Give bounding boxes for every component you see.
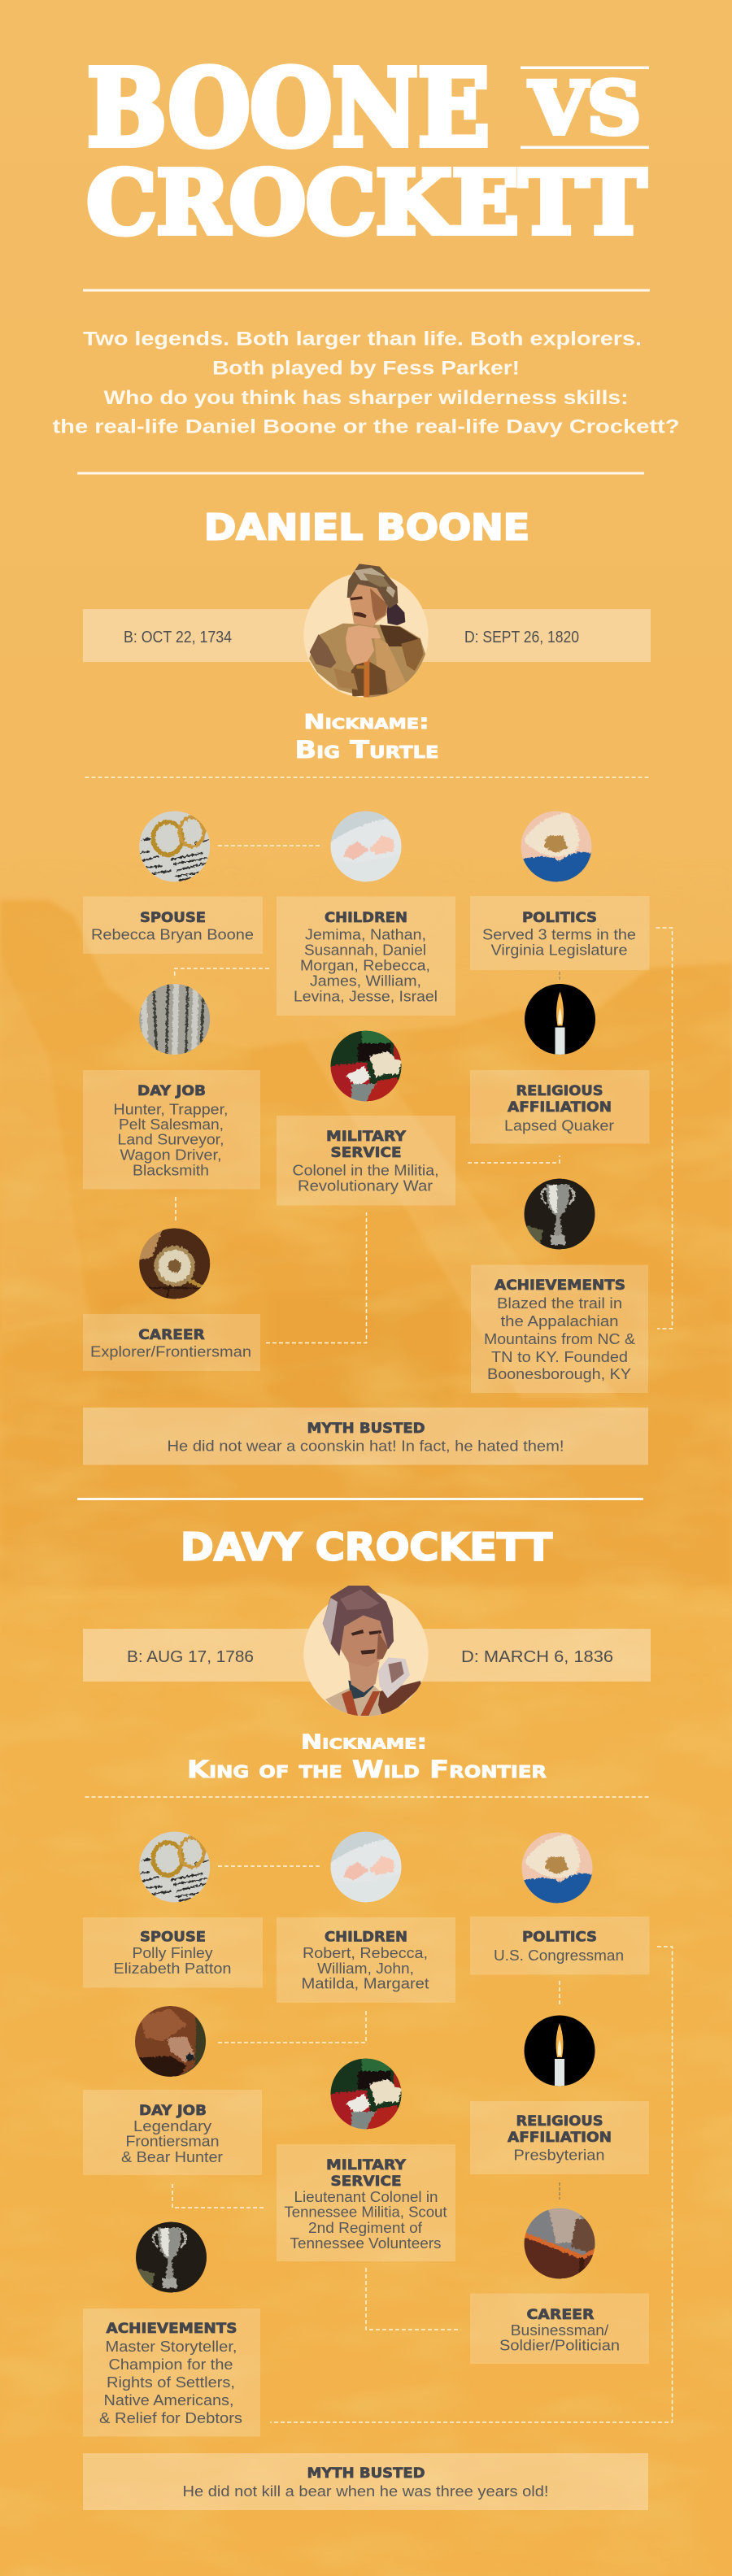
- death date: D: SEPT 26, 1820: [464, 629, 579, 646]
- panel: career: Explorer/Frontiersman: [90, 1343, 251, 1360]
- background: canyon texture: [0, 896, 732, 2576]
- connector: politics to achievements: [656, 928, 672, 1329]
- panel: military service, Crockett: [277, 2144, 455, 2261]
- panel: achievements, Crockett: & Relief for Debtors: [99, 2410, 242, 2426]
- portrait: Davy Crockett: [303, 1586, 429, 1717]
- icon: baby feet: [330, 811, 402, 882]
- nickname: Crockett: King of the Wild Frontier: [187, 1756, 547, 1783]
- icon: trophy: [524, 1178, 595, 1250]
- panel: career: CAREER: [138, 1327, 205, 1342]
- panel: children, Crockett: Matilda, Margaret: [301, 1976, 429, 1992]
- panel: children, Crockett: CHILDREN: [325, 1929, 407, 1945]
- icon: candle: [524, 984, 595, 1057]
- panel: military service, Crockett: Lieutenant Colonel in: [294, 2189, 438, 2205]
- panel: religious affiliation, Crockett: AFFILIATION: [508, 2130, 612, 2145]
- panel: spouse, Crockett: [83, 1917, 263, 1987]
- panel: myth busted, Boone: MYTH BUSTED: [307, 1421, 425, 1436]
- panel: religious affiliation, Crockett: [470, 2101, 649, 2174]
- death date: D: MARCH 6, 1836: [461, 1648, 613, 1666]
- icon: wedding rings: [139, 811, 211, 882]
- connector: career to military: [266, 1212, 366, 1343]
- panel: day job: Land Surveyor,: [117, 1132, 224, 1148]
- connector: politics to achievements, Crockett: [270, 1947, 672, 2422]
- panel: achievements: TN to KY. Founded: [491, 1349, 628, 1365]
- nickname: Boone: Nickname:: [304, 710, 429, 733]
- connector: day job to career: [175, 1197, 176, 1221]
- panel: children, Crockett: William, John,: [317, 1960, 414, 1977]
- birth date: B: OCT 22, 1734: [124, 629, 232, 646]
- panel: day job, Crockett: DAY JOB: [139, 2103, 207, 2118]
- panel: politics: Served 3 terms in the: [482, 927, 636, 943]
- nickname: Crockett: Nickname:: [301, 1730, 427, 1753]
- panel: children: Susannah, Daniel: [304, 942, 426, 958]
- panel: achievements: Mountains from NC &: [484, 1331, 635, 1347]
- icon: soldier: [330, 1030, 402, 1102]
- panel: achievements, Crockett: Champion for the: [109, 2356, 233, 2373]
- panel: religious affiliation: [470, 1070, 649, 1143]
- icon: cowboy hat, Crockett: [521, 1832, 593, 1904]
- panel: career, Crockett: Soldier/Politician: [499, 2337, 620, 2353]
- panel: spouse, Crockett: SPOUSE: [140, 1929, 206, 1945]
- heading: Davy Crockett: DAVY CROCKETT: [181, 1525, 553, 1569]
- panel: day job, Crockett: [83, 2090, 262, 2175]
- panel: myth busted, Crockett: [83, 2453, 648, 2510]
- connector: military to achievements: [468, 1155, 560, 1163]
- icon: cowboy hat: [521, 811, 592, 882]
- panel: achievements: Boonesborough, KY: [487, 1366, 631, 1382]
- icon: baby feet, Crockett: [330, 1831, 402, 1903]
- panel: career, Crockett: CAREER: [527, 2307, 595, 2322]
- intro text: Two legends. Both larger than life. Both explorers.: [83, 329, 642, 350]
- panel: day job: DAY JOB: [137, 1083, 206, 1099]
- panel: religious affiliation: AFFILIATION: [508, 1099, 612, 1115]
- panel: day job, Crockett: Legendary: [133, 2118, 211, 2134]
- title: [86, 47, 649, 254]
- panel: spouse, Crockett: Elizabeth Patton: [114, 1960, 231, 1977]
- panel: children: James, William,: [310, 973, 421, 989]
- icon: suitcase: [524, 2208, 595, 2279]
- panel: achievements, Crockett: Rights of Settlers,: [107, 2374, 235, 2391]
- connector: politics to religion: [559, 972, 560, 981]
- panel: children: Morgan, Rebecca,: [300, 958, 430, 974]
- panel: politics: [470, 896, 649, 970]
- panel: children, Crockett: Robert, Rebecca,: [303, 1945, 428, 1961]
- icon: wedding rings, Crockett: [139, 1831, 211, 1903]
- panel: children, Crockett: [277, 1917, 455, 2003]
- panel: military service, Crockett: 2nd Regiment of: [308, 2220, 423, 2236]
- portrait: Daniel Boone: [303, 564, 429, 699]
- connector: spouse to children: [218, 845, 322, 846]
- icon: candle, Crockett: [524, 2015, 595, 2088]
- panel: religious affiliation: RELIGIOUS: [516, 1083, 603, 1099]
- panel: day job: Hunter, Trapper,: [114, 1101, 228, 1117]
- title word: BOONE: BOONE: [87, 47, 490, 170]
- panel: achievements, Crockett: Native Americans,: [104, 2392, 234, 2408]
- panel: myth busted, Crockett: MYTH BUSTED: [307, 2465, 425, 2481]
- panel: military service: Revolutionary War: [298, 1177, 433, 1194]
- panel: day job: [83, 1070, 260, 1189]
- icon: compass: [139, 1228, 211, 1299]
- panel: children: Jemima, Nathan,: [305, 927, 426, 943]
- panel: politics: POLITICS: [522, 910, 597, 925]
- title word: VS with rules: VS: [529, 66, 641, 150]
- panel: military service: SERVICE: [330, 1145, 402, 1160]
- panel: spouse: Rebecca Bryan Boone: [91, 927, 254, 943]
- title word: CROCKETT: CROCKETT: [86, 153, 646, 254]
- panel: politics, Crockett: [470, 1917, 649, 1974]
- panel: politics, Crockett: U.S. Congressman: [494, 1947, 624, 1964]
- panel: military service: MILITARY: [326, 1129, 407, 1144]
- panel: day job: Wagon Driver,: [120, 1147, 221, 1163]
- panel: children: CHILDREN: [325, 910, 407, 925]
- panel: career, Crockett: [470, 2293, 649, 2364]
- icon: trophy, Crockett: [135, 2221, 207, 2293]
- panel: myth busted, Boone: [83, 1408, 648, 1465]
- panel: spouse, Crockett: Polly Finley: [132, 1945, 213, 1961]
- panel: achievements, Crockett: ACHIEVEMENTS: [106, 2321, 237, 2336]
- panel: myth busted, Boone: He did not wear a coonskin hat! In fact, he hated them!: [168, 1438, 564, 1454]
- intro text: the real-life Daniel Boone or the real-life Davy Crockett?: [52, 416, 680, 437]
- panel: career, Crockett: Businessman/: [511, 2322, 608, 2339]
- heading: Daniel Boone: DANIEL BOONE: [204, 507, 529, 548]
- connector: religion to career, Crockett: [559, 2182, 560, 2200]
- panel: military service: [277, 1116, 455, 1205]
- connector: politics to religion, Crockett: [559, 1981, 560, 2007]
- dates bar: Crockett: [83, 1629, 651, 1682]
- connector: children to day job, Crockett: [217, 2011, 366, 2043]
- panel: religious affiliation: Lapsed Quaker: [504, 1117, 614, 1134]
- intro text: Who do you think has sharper wilderness skills:: [104, 387, 628, 409]
- nickname: Boone: [294, 710, 439, 764]
- icon: soldier, Crockett: [330, 2058, 402, 2130]
- panel: achievements: the Appalachian: [501, 1313, 618, 1329]
- panel: day job: Blacksmith: [133, 1163, 209, 1179]
- panel: spouse: SPOUSE: [140, 910, 206, 925]
- panel: military service, Crockett: SERVICE: [330, 2174, 402, 2189]
- panel: day job: Pelt Salesman,: [119, 1116, 224, 1133]
- panel: politics: Virginia Legislature: [491, 942, 628, 958]
- icon: tree bark: [139, 984, 211, 1055]
- nickname: Crockett: [187, 1730, 547, 1783]
- panel: day job, Crockett: & Bear Hunter: [121, 2149, 223, 2165]
- nickname: Boone: Big Turtle: [294, 736, 439, 764]
- connector: day job to achievements, Crockett: [172, 2184, 266, 2208]
- connector: spouse to children, Crockett: [218, 1865, 322, 1867]
- panel: achievements, Crockett: Master Storyteller,: [106, 2339, 237, 2355]
- panel: military service: Colonel in the Militia,: [293, 1163, 439, 1179]
- intro text: [52, 329, 680, 437]
- connector: military to career, Crockett: [366, 2268, 460, 2330]
- panel: spouse: [83, 896, 263, 954]
- panel: myth busted, Crockett: He did not kill a bear when he was three years old!: [182, 2483, 548, 2500]
- panel: day job, Crockett: Frontiersman: [125, 2134, 220, 2150]
- panel: achievements: [471, 1265, 648, 1393]
- panel: career: [83, 1314, 260, 1371]
- panel: military service, Crockett: MILITARY: [326, 2157, 407, 2173]
- connector: children to day job: [175, 968, 269, 978]
- panel: religious affiliation, Crockett: Presbyterian: [514, 2147, 605, 2163]
- panel: religious affiliation, Crockett: RELIGIOUS: [516, 2113, 603, 2129]
- birth date: B: AUG 17, 1786: [127, 1648, 254, 1666]
- panel: children: [277, 896, 455, 1016]
- panel: achievements: ACHIEVEMENTS: [495, 1277, 625, 1293]
- panel: politics, Crockett: POLITICS: [522, 1929, 597, 1945]
- panel: achievements, Crockett: [83, 2308, 260, 2436]
- dates bar: Boone: [83, 609, 651, 662]
- intro text: Both played by Fess Parker!: [212, 358, 520, 379]
- icon: bear: [135, 2005, 207, 2077]
- panel: children: Levina, Jesse, Israel: [294, 989, 438, 1005]
- panel: achievements: Blazed the trail in: [497, 1295, 622, 1312]
- panel: military service, Crockett: Tennessee Militia, Scout: [285, 2204, 447, 2220]
- panel: military service, Crockett: Tennessee Volunteers: [290, 2235, 441, 2252]
